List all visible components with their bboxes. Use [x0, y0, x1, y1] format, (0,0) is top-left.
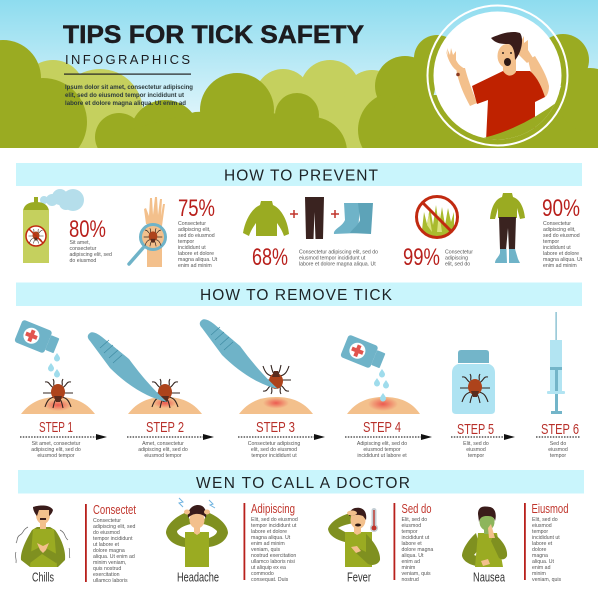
- stat 75%: incididunt ut: [178, 245, 206, 251]
- intro text: Ipsum dolor sit amet, consectetur adipiscing: [65, 84, 193, 91]
- red divider with text: sed do: enim ad: [402, 559, 420, 565]
- stat 90%: 90%: [542, 195, 580, 222]
- step descriptions: tempor incididunt ut: [251, 453, 297, 459]
- step descriptions: Elit, sed do: [463, 441, 489, 447]
- red divider with text: eiusmod: veniam, quis: [532, 577, 562, 583]
- stat 99%: elit, sed do: [445, 262, 470, 268]
- red divider with text: consectet: exercitation: [93, 572, 120, 578]
- man in circle: [428, 6, 568, 146]
- stat 68%: Consectetur adipiscing elit, sed do: [299, 250, 378, 256]
- stat 75%: sed do eiusmod: [178, 233, 215, 239]
- red divider with text: eiusmod: Elit, sed do: [532, 517, 558, 523]
- head: [498, 44, 516, 68]
- red divider with text: adipiscing: nostrud exercitation: [251, 553, 296, 559]
- red divider with text: eiusmod: labore et: [532, 541, 553, 547]
- red divider with text: adipiscing: ut aliquip ex ea: [251, 565, 286, 571]
- intro text: elit, sed do eiusmod tempor incididunt ut: [65, 92, 185, 99]
- heading: when to call a doctor: [18, 470, 584, 494]
- stat 75%: [178, 195, 218, 269]
- red divider with text: consectet: [85, 502, 136, 584]
- step descriptions: adipiscing elit, sed do: [31, 447, 81, 453]
- stat 75%: magna aliqua. Ut: [178, 257, 218, 263]
- step labels: STEP 2: [146, 419, 184, 436]
- red divider with text: consectet: do eiusmod: [93, 530, 120, 536]
- panel: how to remove tick: [14, 282, 582, 459]
- stat 75%: labore et dolore: [178, 251, 214, 257]
- red divider with text: eiusmod: Eiusmod: [532, 501, 568, 516]
- heading: how to remove tick: HOW TO REMOVE TICK: [200, 287, 393, 304]
- stat 80%: adipiscing elit, sed: [70, 252, 112, 258]
- step labels: [39, 419, 579, 438]
- step descriptions: tempor: [468, 453, 484, 459]
- stat 75%: adipiscing elit,: [178, 227, 211, 233]
- step descriptions: eiusmod: [548, 447, 568, 453]
- step descriptions: Consectetur adipiscing: [248, 441, 300, 447]
- step 5 illustration: jar: [452, 350, 495, 414]
- red divider with text: sed do: minim: [402, 565, 415, 571]
- red divider with text: consectet: tempor incididunt: [93, 536, 133, 542]
- panel: when to call a doctor: [15, 470, 584, 584]
- red divider with text: sed do: labore et: [402, 541, 422, 547]
- red divider with text: consectet: quis nostrud: [93, 566, 121, 572]
- red divider with text: adipiscing: labore et dolore: [251, 529, 287, 535]
- red divider with text: sed do: tempor: [402, 529, 418, 535]
- step labels: STEP 4: [363, 419, 401, 436]
- step descriptions: eiusmod tempor: [144, 453, 182, 459]
- icon: boots: [334, 203, 373, 234]
- red divider with text: consectet: ut labore et: [93, 542, 120, 548]
- stat 80%: Sit amet,: [70, 240, 90, 246]
- red divider with text: eiusmod: incididunt ut: [532, 535, 560, 541]
- red divider with text: adipiscing: ullamco laboris nisi: [251, 559, 295, 565]
- stat 80%: 80%: [69, 216, 106, 243]
- step descriptions: elit, sed do eiusmod: [251, 447, 297, 453]
- red divider with text: eiusmod: [524, 501, 568, 583]
- red divider with text: adipiscing: [244, 501, 298, 583]
- stat 75%: enim ad minim: [178, 263, 212, 269]
- red divider with text: consectet: Consectet: [93, 502, 136, 517]
- red divider with text: sed do: incididunt ut: [402, 535, 430, 541]
- red divider with text: sed do: [394, 501, 433, 583]
- icon: spray can: [23, 189, 84, 263]
- red divider with text: eiusmod: eiusmod: [532, 523, 552, 529]
- red divider with text: sed do: aliqua. Ut: [402, 553, 424, 559]
- heading: how to prevent: [16, 163, 582, 186]
- red divider with text: consectet: aliqua. Ut enim ad: [93, 554, 135, 560]
- stat 68%: [252, 244, 378, 271]
- panel: how to prevent: [16, 163, 583, 271]
- shirt: [472, 71, 545, 141]
- icon: no grass sign: [416, 196, 458, 238]
- red divider with text: sed do: Sed do: [402, 501, 432, 516]
- red divider with text: sed do: Elit, sed do: [402, 517, 427, 523]
- red divider with text: eiusmod: aliqua. Ut: [532, 559, 554, 565]
- icon: hand with magnifier: [129, 197, 166, 267]
- label: fever: Fever: [347, 570, 371, 584]
- dotted step arrows: [20, 434, 580, 440]
- red divider with text: consectet: ullamco laboris: [93, 578, 128, 584]
- red divider with text: sed do: veniam, quis: [402, 571, 431, 577]
- red divider with text: eiusmod: enim ad: [532, 565, 551, 571]
- red divider with text: adipiscing: Adipiscing: [251, 501, 295, 516]
- red divider with text: sed do: dolore magna: [402, 547, 433, 553]
- label: headache: Headache: [177, 570, 219, 584]
- red divider with text: sed do: eiusmod: [402, 523, 421, 529]
- step 6 illustration: syringe: [547, 312, 565, 414]
- red divider with text: eiusmod: magna: [532, 553, 548, 559]
- red divider with text: adipiscing: veniam, quis: [251, 547, 281, 553]
- red divider with text: adipiscing: Elit, sed do eiusmod: [251, 517, 298, 523]
- dark bushes: [0, 34, 598, 148]
- stat 99%: adipiscing: [445, 256, 468, 262]
- red divider with text: adipiscing: magna aliqua. Ut: [251, 535, 291, 541]
- step 4 illustration: [340, 334, 420, 414]
- heading: how to prevent: HOW TO PREVENT: [224, 168, 379, 185]
- red divider with text: eiusmod: tempor: [532, 529, 548, 535]
- stat 90%: magna aliqua. Ut: [543, 257, 583, 263]
- label: chills: Chills: [32, 570, 54, 584]
- step labels: STEP 5: [457, 421, 494, 438]
- subtitle: INFOGRAPHICS: [65, 52, 190, 67]
- stat 90%: adipiscing elit,: [543, 227, 576, 233]
- stat 80%: [69, 216, 112, 264]
- step descriptions: eiusmod tempor: [363, 447, 401, 453]
- red divider with text: consectet: minim veniam,: [93, 560, 126, 566]
- red divider with text: adipiscing: enim ad minim: [251, 541, 285, 547]
- stat 68%: 68%: [252, 244, 288, 271]
- step descriptions: eiusmod tempor: [37, 453, 75, 459]
- intro text: [65, 84, 193, 107]
- red divider with text: consectet: dolore magna: [93, 548, 125, 554]
- stat 75%: Consectetur: [178, 221, 206, 227]
- stat 80%: consectetur: [70, 246, 97, 252]
- figure: headache: [166, 498, 228, 567]
- red divider with text: adipiscing: tempor incididunt ut: [251, 523, 297, 529]
- red divider with text: eiusmod: dolore: [532, 547, 547, 553]
- stat 68%: eiusmod tempor incididunt ut: [299, 256, 366, 262]
- stat 80%: do eiusmod: [70, 258, 96, 264]
- stat 90%: sed do eiusmod: [543, 233, 580, 239]
- step labels: STEP 1: [39, 419, 73, 436]
- title: TIPS FOR TICK SAFETY: [63, 21, 364, 49]
- step labels: STEP 3: [256, 419, 295, 436]
- figure: chills: [15, 505, 70, 567]
- step descriptions: Sit amet, consectetur: [32, 441, 81, 447]
- step descriptions: tempor: [550, 453, 566, 459]
- step descriptions: eiusmod: [466, 447, 486, 453]
- step 3 illustration: [200, 319, 313, 414]
- figure: fever: [328, 508, 380, 567]
- red divider with text: consectet: Consectetur: [93, 518, 121, 524]
- stat 90%: Consectetur: [543, 221, 571, 227]
- stat 90%: tempor: [543, 239, 559, 245]
- stat 90%: incididunt ut: [543, 245, 571, 251]
- step labels: STEP 6: [541, 421, 579, 438]
- stat 75%: 75%: [178, 195, 215, 222]
- right arm: [528, 56, 549, 97]
- step descriptions: incididunt ut labore et: [357, 453, 407, 459]
- light bushes: [38, 60, 379, 148]
- left arm: [456, 68, 477, 106]
- stat 99%: [403, 244, 473, 271]
- red divider with text: sed do: nostrud: [402, 577, 419, 583]
- step 1 illustration: [14, 319, 95, 414]
- stat 99%: Consectetur: [445, 250, 473, 256]
- heading: how to remove tick: [16, 282, 582, 306]
- step descriptions: Sed do: [550, 441, 566, 447]
- stat 90%: [542, 195, 583, 269]
- stat 75%: tempor: [178, 239, 194, 245]
- step 2 illustration: [88, 332, 202, 414]
- red divider with text: eiusmod: minim: [532, 571, 546, 577]
- step descriptions: adipiscing elit, sed do: [138, 447, 188, 453]
- icon: plus: [331, 210, 339, 218]
- intro text: labore et dolore magna aliqua. Ut enim ad: [65, 100, 186, 107]
- step descriptions: [31, 441, 568, 459]
- red divider with text: consectet: adipiscing elit, sed: [93, 524, 136, 530]
- stat 99%: 99%: [403, 244, 440, 271]
- icon: sweater: [243, 201, 289, 236]
- icon: dressed figure: [490, 193, 525, 263]
- step descriptions: Amet, consectetur: [142, 441, 184, 447]
- header banner: [0, 0, 598, 148]
- stat 90%: labore et dolore: [543, 251, 579, 257]
- icon: plus: [290, 210, 298, 218]
- stat 90%: enim ad minim: [543, 263, 577, 269]
- step descriptions: Adipiscing elit, sed do: [357, 441, 407, 447]
- label: nausea: Nausea: [473, 570, 506, 584]
- heading: when to call a doctor: WEN TO CALL A DOCTOR: [196, 475, 410, 492]
- figure: nausea: [462, 507, 507, 567]
- red divider with text: adipiscing: commodo: [251, 571, 274, 577]
- red divider with text: adipiscing: consequat. Duis: [251, 577, 289, 583]
- stat 68%: labore et dolore magna aliqua. Ut: [299, 262, 376, 268]
- icon: trousers: [305, 197, 324, 239]
